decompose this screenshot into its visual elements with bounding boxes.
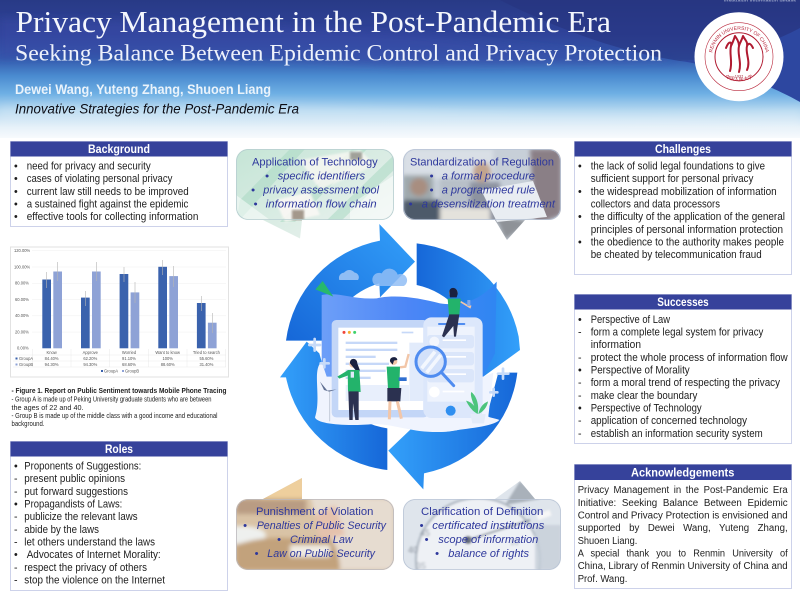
paper plane xyxy=(315,281,333,297)
callout: standardization of regulation xyxy=(403,149,561,241)
arrow: top-right xyxy=(417,243,520,377)
panel: acknowledgements: Privacy Management in the Post-Pandemic Era xyxy=(578,485,788,496)
panel: roles: • xyxy=(14,549,18,561)
application of technology text: information flow chain xyxy=(266,199,377,211)
panel: acknowledgements: Shuoen Liang. xyxy=(578,536,637,547)
panel: roles: abide by the laws xyxy=(24,524,99,536)
clarification of definition text: scope of information xyxy=(438,534,538,546)
bars group B xyxy=(53,272,217,348)
callout: clarification of definition: 10 xyxy=(510,538,519,547)
panel: successes: protect the whole process of information flow xyxy=(591,352,788,364)
callout: clarification of definition: 45 xyxy=(420,528,430,538)
application of technology text: • xyxy=(254,199,258,211)
figure caption xyxy=(12,386,226,428)
panel: acknowledgements: Acknowledgements xyxy=(631,466,735,480)
panel: successes: Successes xyxy=(657,295,709,309)
bar chart: public sentiment: 94.30% xyxy=(83,362,98,367)
header banner xyxy=(0,0,800,138)
arrow: bottom-left xyxy=(280,342,387,470)
panel: roles: - xyxy=(14,524,18,536)
bar chart: public sentiment: 55.60% xyxy=(199,356,214,361)
standardization of regulation text: • xyxy=(430,185,434,197)
panel: successes: information xyxy=(591,339,641,351)
panel: challenges: • xyxy=(578,211,582,223)
panel: background: • xyxy=(14,186,18,198)
panel: successes: - xyxy=(578,390,582,402)
panel: roles: present public opinions xyxy=(24,473,125,485)
panel: successes: • xyxy=(578,314,582,326)
callout: clarification of definition: 40 xyxy=(408,545,418,555)
panel: successes: - xyxy=(578,352,582,364)
logo: Renmin University of China seal: 1937 xyxy=(735,74,743,78)
subtitle: Seeking Balance Between Epidemic Control and Privacy Protection xyxy=(15,40,663,66)
data table xyxy=(13,349,226,367)
logo: Renmin University of China seal xyxy=(694,12,784,102)
bar chart: public sentiment: GroupB xyxy=(19,362,33,367)
panel: roles: publicize the relevant laws xyxy=(24,511,138,523)
application of technology text: • xyxy=(251,185,255,197)
panel: acknowledgements: A special thank you to Renmin University of xyxy=(578,548,788,560)
standardization of regulation text xyxy=(408,157,556,211)
bar chart: public sentiment: 100% xyxy=(162,356,173,361)
panel: challenges: the widespread mobilization of information xyxy=(591,186,777,198)
panel: successes: - xyxy=(578,415,582,427)
bar chart: public sentiment: 60.00% xyxy=(15,297,29,302)
panel: successes: • xyxy=(578,402,582,414)
woman with tablet xyxy=(337,359,361,420)
panel: successes: - xyxy=(578,428,582,440)
clouds xyxy=(339,269,407,286)
panel: roles: • xyxy=(14,460,18,472)
panel: roles: • xyxy=(14,498,18,510)
figure caption: - Group B is made up of the middle class with a good income and educational xyxy=(12,411,218,420)
panel: acknowledgements xyxy=(574,464,792,588)
callout: clarification of definition: 35 xyxy=(416,561,426,571)
logo: Renmin University of China seal: RENMIN UNIVERSITY OF CHINA xyxy=(709,26,769,53)
panel: successes: Perspective of Technology xyxy=(591,402,702,414)
browser window xyxy=(332,320,428,417)
panel: successes: - xyxy=(578,326,582,338)
panel: background: need for privacy and security xyxy=(27,160,151,172)
figure caption: - Figure 1. Report on Public Sentiment towards Mobile Phone Tracing xyxy=(12,386,226,395)
bar chart: public sentiment: 100.00% xyxy=(14,264,31,269)
panel: successes: establish an information security system xyxy=(591,428,763,440)
panel: roles: Roles xyxy=(105,442,133,456)
clarification of definition text: • xyxy=(424,534,428,546)
panel: challenges: collectors and data processors xyxy=(591,198,720,210)
panel: background: effective tools for collecting information xyxy=(27,211,198,223)
panel: roles: stop the violence on the Internet xyxy=(24,574,165,586)
panel: roles: put forward suggestions xyxy=(24,486,128,498)
ground blob xyxy=(315,362,499,432)
title: Privacy Management in the Post-Pandemic Era xyxy=(16,4,611,39)
panel: background xyxy=(10,142,228,226)
tagline: Innovative Strategies for the Post-Pandemic Era xyxy=(15,102,299,116)
bar chart: public sentiment: 31.40% xyxy=(199,362,214,367)
panel: successes: Perspective of Law xyxy=(591,314,670,326)
bar chart: public sentiment: 84.40% xyxy=(45,356,59,361)
panel: roles: - xyxy=(14,486,18,498)
clarification of definition text: certificated institutions xyxy=(432,520,545,532)
standardization of regulation text: a desensitization treatment xyxy=(422,199,556,211)
application of technology text: • xyxy=(265,171,269,183)
background heading xyxy=(10,142,228,156)
standardization of regulation text: a programmed rule xyxy=(442,185,535,197)
panel: challenges: Challenges xyxy=(655,142,711,156)
punishment of violation text: • xyxy=(243,520,247,532)
application of technology text: Application of Technology xyxy=(252,157,378,169)
phone screen xyxy=(423,317,483,418)
punishment of violation text: • xyxy=(254,548,258,560)
panel: background: • xyxy=(14,160,18,172)
panel: roles: let others understand the laws xyxy=(24,536,155,548)
panel: roles: Proponents of Suggestions: xyxy=(24,460,141,472)
standardization of regulation text: Standardization of Regulation xyxy=(410,157,554,169)
panel: challenges: • xyxy=(578,186,582,198)
man in green shirt xyxy=(387,354,409,419)
bar chart: public sentiment: 91.10% xyxy=(122,356,136,361)
standardization of regulation text: • xyxy=(430,171,434,183)
panel: roles xyxy=(10,442,228,590)
panel: background: • xyxy=(14,211,18,223)
panel: background: • xyxy=(14,173,18,185)
panel: background: • xyxy=(14,198,18,210)
bar chart: public sentiment: Know xyxy=(46,350,57,355)
punishment of violation text xyxy=(243,506,387,560)
wavy back panel xyxy=(322,282,497,407)
bar chart: public sentiment: Tried to search xyxy=(193,350,221,355)
panel: challenges: the lack of solid legal foundations to give xyxy=(591,160,765,172)
chart legend xyxy=(101,370,103,372)
bars group A xyxy=(42,267,206,348)
bar chart: public sentiment: 62.20% xyxy=(83,356,98,361)
standardization of regulation text: • xyxy=(408,199,412,211)
callout: clarification of definition xyxy=(403,481,561,570)
challenges heading xyxy=(574,142,792,156)
bar chart: public sentiment: Worried xyxy=(122,350,137,355)
bar chart: public sentiment: GroupA xyxy=(19,356,33,361)
panel: roles: - xyxy=(14,562,18,574)
plus signs xyxy=(309,339,508,396)
bar chart: public sentiment: 94.30% xyxy=(45,362,59,367)
panel: successes: form a complete legal system for privacy xyxy=(591,326,764,338)
successes heading xyxy=(574,294,792,310)
panel: background: Background xyxy=(88,142,150,156)
logo: Renmin University of China seal: 中国人民大学 xyxy=(726,74,752,82)
panel: challenges: • xyxy=(578,160,582,172)
panel: roles: - xyxy=(14,574,18,586)
clarification of definition text: • xyxy=(435,548,439,560)
clarification of definition text xyxy=(420,506,545,560)
callout: punishment of violation xyxy=(236,478,394,570)
panel: background: a sustained fight against the epidemic xyxy=(27,198,189,210)
potted plant xyxy=(466,392,488,423)
panel: challenges: the difficulty of the application of the general xyxy=(591,211,785,223)
panel: successes: - xyxy=(578,377,582,389)
bar chart: public sentiment: GroupB xyxy=(125,368,139,374)
panel: roles: - xyxy=(14,536,18,548)
panel: successes: make clear the boundary xyxy=(591,390,698,402)
panel: roles: respect the privacy of others xyxy=(24,562,147,574)
panel: acknowledgements: Control and Privacy Protection is envisioned and xyxy=(578,510,788,522)
punishment of violation text: Criminal Law xyxy=(290,534,353,546)
standardization of regulation text: a formal procedure xyxy=(442,171,535,183)
panel: roles: - xyxy=(14,473,18,485)
laptop stand xyxy=(320,382,337,421)
bar chart: public sentiment: 80.00% xyxy=(15,281,29,286)
bar chart: public sentiment: Want to know xyxy=(155,350,180,355)
figure caption: - Group A is made up of Peking University graduate students who are between xyxy=(12,394,212,404)
authors: Dewei Wang, Yuteng Zhang, Shuoen Liang xyxy=(15,82,271,97)
arrow: top-left xyxy=(286,224,415,341)
bar chart: public sentiment: GroupA xyxy=(104,368,118,374)
application of technology text: specific identifiers xyxy=(278,171,365,183)
acknowledgements heading xyxy=(574,464,792,480)
clarification of definition text: • xyxy=(420,520,424,532)
bar chart: public sentiment: 68.60% xyxy=(122,362,136,367)
panel: challenges: sufficient support for personal privacy xyxy=(591,173,754,185)
panel: challenges xyxy=(574,142,792,274)
punishment of violation text: • xyxy=(277,534,281,546)
roles heading xyxy=(10,442,228,456)
application of technology text xyxy=(251,157,379,211)
panel: acknowledgements: Prof. Wang. xyxy=(578,574,627,585)
callout: application of technology xyxy=(236,149,394,239)
panel: successes: Perspective of Morality xyxy=(591,364,690,376)
arrow: bottom-right xyxy=(388,373,517,489)
panel: successes: • xyxy=(578,364,582,376)
figure caption: the ages of 22 and 40. xyxy=(12,403,84,412)
bar chart: public sentiment: 88.60% xyxy=(161,362,175,367)
panel: successes: form a moral trend of respecting the privacy xyxy=(591,377,781,389)
bar chart: public sentiment: Approve xyxy=(83,350,99,355)
panel: challenges: be cheated by telecommunication fraud xyxy=(591,249,762,261)
panel: background: cases of violating personal privacy xyxy=(27,173,173,185)
panel: acknowledgements: Initiative: Seeking Balance Between Epidemic xyxy=(578,498,788,509)
panel: roles: - xyxy=(14,511,18,523)
punishment of violation text: Law on Public Security xyxy=(267,548,376,560)
bar chart: public sentiment: 20.00% xyxy=(15,329,29,334)
panel: challenges: principles of personal information protection xyxy=(591,224,783,236)
central cycle illustration xyxy=(280,224,520,489)
punishment of violation text: Penalties of Public Security xyxy=(257,520,387,532)
bar chart: public sentiment: 0.00% xyxy=(17,346,29,351)
panel: background: current law still needs to be improved xyxy=(27,186,189,198)
error bars xyxy=(47,260,212,333)
magnifying glass xyxy=(416,347,454,386)
person on phone xyxy=(442,288,471,337)
bar chart: public sentiment: 120.00% xyxy=(14,248,31,253)
bar chart: public sentiment xyxy=(10,247,228,377)
panel: successes: application of concerned technology xyxy=(591,415,748,427)
application of technology text: privacy assessment tool xyxy=(262,185,379,197)
clarification of definition text: balance of rights xyxy=(448,548,529,560)
panel: acknowledgements: China, Library of Renmin University of China and xyxy=(578,561,788,572)
panel: challenges: the obedience to the authority makes people xyxy=(591,236,784,248)
panel: roles: Advocates of Internet Morality: xyxy=(27,549,161,561)
bar chart: public sentiment: 40.00% xyxy=(15,313,29,318)
clarification of definition text: Clarification of Definition xyxy=(421,506,543,518)
panel: successes xyxy=(574,294,792,444)
panel: challenges: • xyxy=(578,236,582,248)
punishment of violation text: Punishment of Violation xyxy=(256,506,373,518)
panel: acknowledgements: supported by Dewei Wang, Yuteng Zhang, xyxy=(578,523,788,534)
figure caption: background. xyxy=(12,419,44,428)
panel: roles: Propagandists of Laws: xyxy=(24,498,122,510)
